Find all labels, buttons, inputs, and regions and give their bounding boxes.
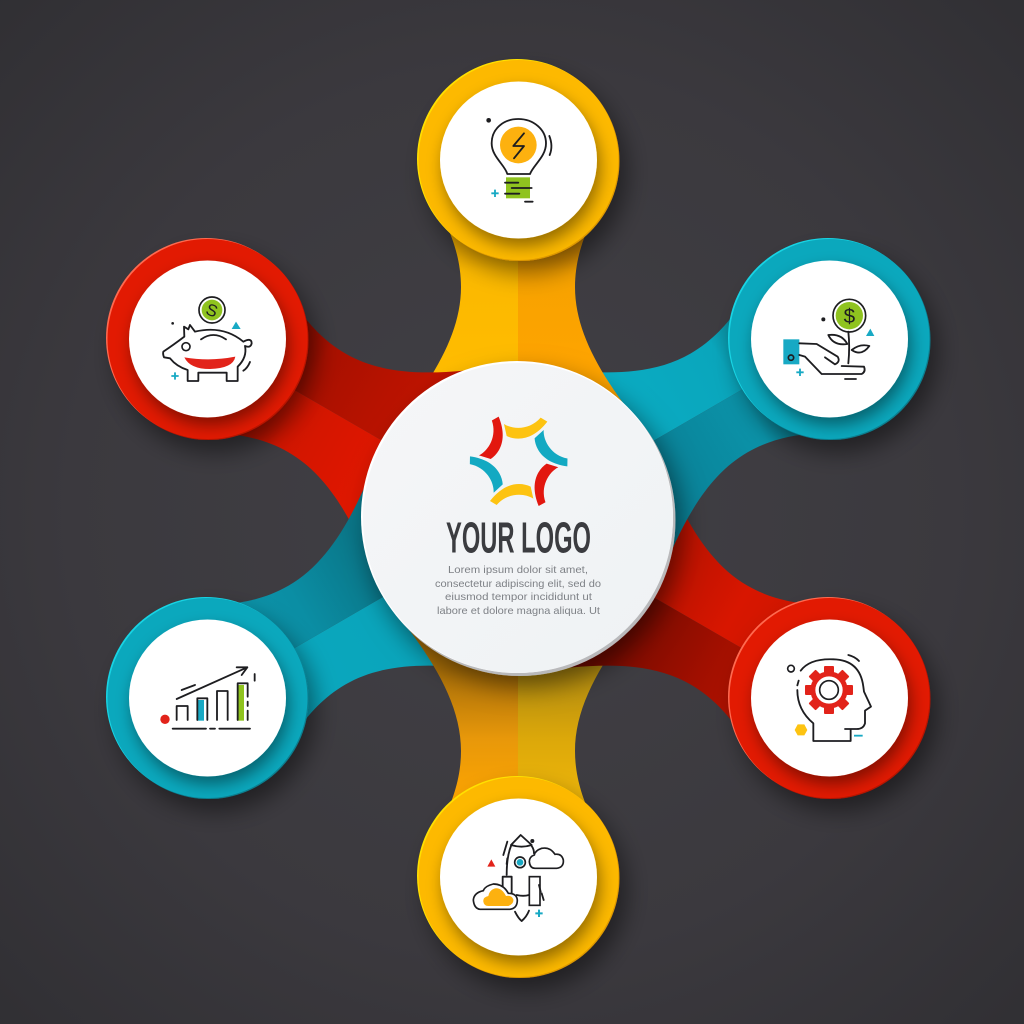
icon: hand holding money plant	[783, 299, 874, 379]
logo title: YOUR LOGO	[446, 514, 591, 562]
logo mark	[467, 415, 571, 508]
body text: consectetur adipiscing elit, sed do	[435, 578, 601, 590]
central disc	[361, 361, 676, 676]
icon: head with gear	[788, 655, 871, 741]
node: lower right red head with gear	[728, 597, 930, 799]
node: upper right cyan hand and plant	[728, 238, 930, 440]
connector arms: first halves	[187, 209, 849, 829]
node: upper left red piggy bank	[106, 238, 308, 440]
node: top yellow lightbulb	[417, 59, 620, 261]
body text: Lorem ipsum dolor sit amet,	[448, 564, 588, 576]
body text: eiusmod tempor incididunt ut	[445, 591, 592, 603]
icon: rocket and clouds	[473, 835, 563, 921]
connector arms: overlapping darker halves	[187, 209, 849, 829]
node: lower left cyan growth chart	[106, 597, 308, 799]
icon: hand holding money plant: $	[844, 305, 856, 328]
body text	[435, 564, 601, 617]
icon: rising bar chart	[160, 667, 255, 729]
icon: lightbulb	[486, 118, 551, 202]
icon: piggy bank with coin	[163, 297, 252, 381]
body text: labore et dolore magna aliqua. Ut	[437, 605, 600, 617]
node: bottom yellow rocket	[417, 776, 620, 978]
icon: piggy bank with coin: S	[203, 300, 220, 321]
